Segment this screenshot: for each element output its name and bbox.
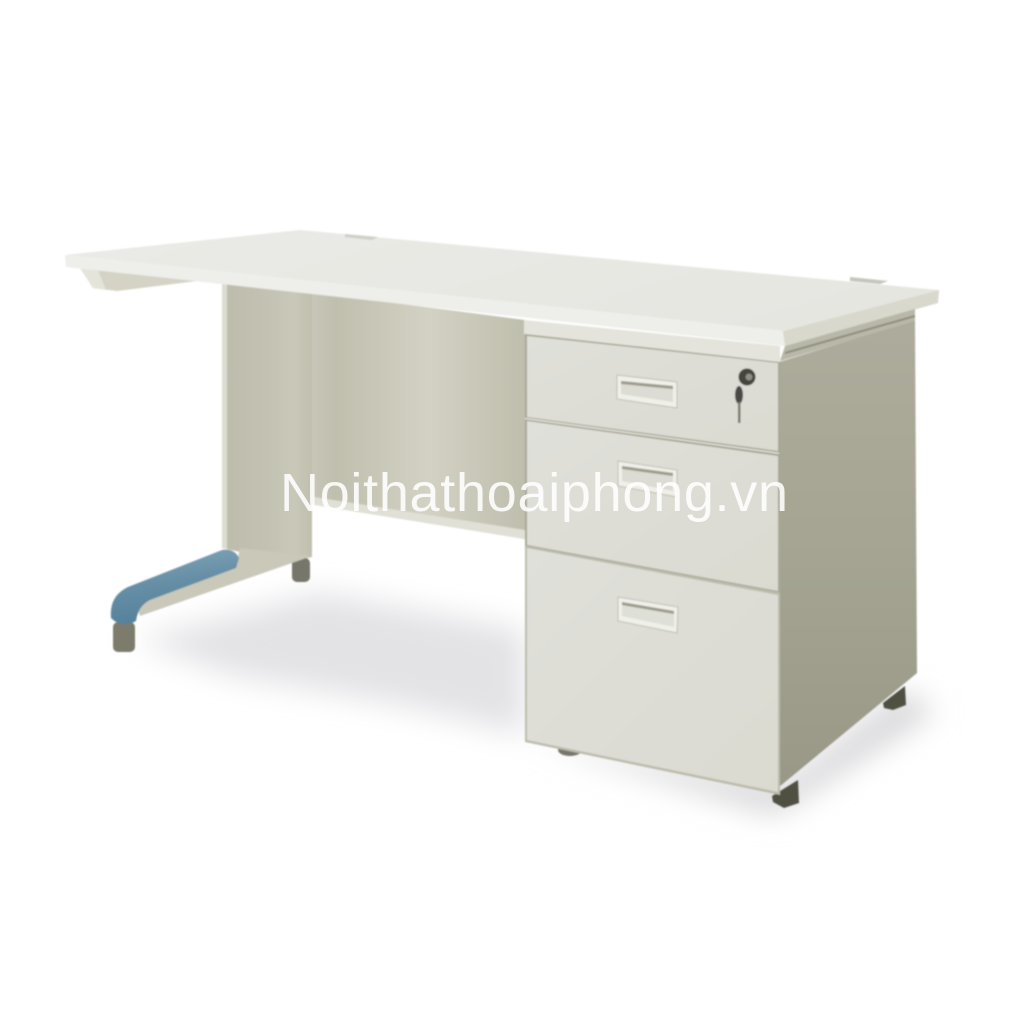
pedestal feet: [558, 686, 906, 808]
pedestal side: [779, 320, 917, 787]
watermark: Noithathoaiphong.vn: [280, 463, 788, 523]
drawer 1: [525, 334, 780, 453]
modesty panel lower lit band: [314, 497, 525, 539]
desk top: [65, 230, 939, 361]
left leg panel: [222, 283, 312, 575]
drawer 3: [525, 546, 780, 795]
icon: lock and keys: [735, 368, 756, 423]
modesty panel: [310, 292, 525, 539]
drawer frame: [524, 320, 780, 362]
drawer 2: [525, 419, 780, 593]
leg foot: blue bar and glides: [111, 548, 312, 652]
floor shadow: [135, 592, 935, 815]
desk top underside bracket: [80, 268, 197, 291]
